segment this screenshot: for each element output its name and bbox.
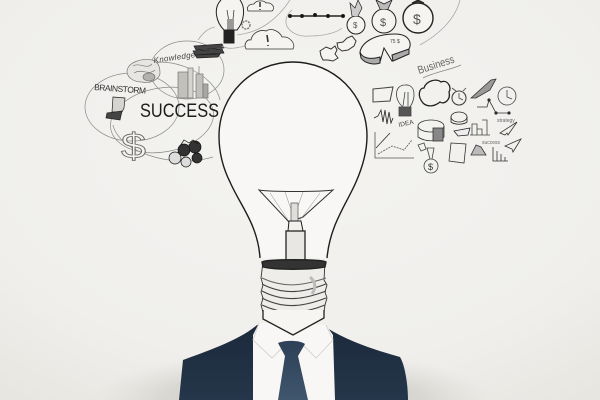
icon: large cloud with exclamation	[245, 30, 294, 49]
waveform	[374, 110, 393, 124]
icon: gear	[242, 21, 250, 29]
icon: paper plane small	[505, 139, 521, 152]
brainstorm label: BRAINSTORM	[94, 82, 146, 96]
icon: puzzle pieces	[320, 36, 356, 61]
business label: Business	[416, 54, 456, 77]
icon: brain	[127, 59, 160, 83]
icon: book stack	[193, 44, 224, 58]
icon: wall clock	[498, 87, 516, 105]
icon: big cloud	[419, 80, 450, 106]
connector curves	[198, 0, 460, 48]
path chart with dots	[477, 99, 510, 114]
small bar chart	[493, 147, 508, 161]
icon: idea bulb	[396, 85, 414, 116]
businessman suit	[179, 323, 408, 400]
shirt	[253, 323, 335, 400]
knowledge label: Knowledge	[153, 50, 196, 65]
filament cone	[259, 190, 333, 261]
icon: money bags row: $	[380, 17, 386, 29]
line graph	[375, 132, 414, 158]
icon: chess rook	[106, 97, 125, 120]
glass outline	[219, 62, 367, 258]
idea label: IDEA	[398, 119, 415, 129]
icon: paper plane large	[500, 122, 517, 135]
icon: money bags row: $	[353, 21, 358, 30]
main light bulb drawing	[219, 62, 367, 335]
icon: city buildings	[178, 66, 208, 98]
icon: money bags	[169, 140, 202, 167]
tie	[278, 341, 308, 400]
left sketch cluster: success diagram	[85, 41, 224, 167]
collar shading	[253, 323, 333, 358]
icon: money bags row: $	[413, 11, 421, 27]
bar chart	[470, 120, 490, 135]
icon: clipboard	[449, 143, 466, 163]
icon: stacked coins	[451, 112, 470, 136]
pie label: 75 $	[390, 39, 400, 45]
dark bulb collar	[262, 260, 326, 269]
icon: pencil	[471, 79, 496, 98]
lower neck point	[263, 310, 324, 335]
icon: money bags row	[347, 0, 433, 34]
icon: dollar sign: $	[121, 127, 146, 166]
success label: SUCCESS	[140, 101, 219, 122]
strategy label: strategy	[497, 118, 515, 124]
jacket	[179, 325, 408, 400]
icon: mountain chart	[471, 145, 486, 155]
icon: money sack with dollar: $	[428, 162, 433, 172]
icon: top light bulb	[216, 0, 244, 43]
pie chart	[360, 34, 410, 64]
screw base	[261, 260, 327, 312]
success small label: success	[482, 140, 501, 146]
icon: note card	[373, 87, 393, 102]
icon: small tags	[418, 143, 426, 151]
orbit ellipses	[85, 41, 224, 161]
right sketch cluster: business	[373, 54, 521, 173]
icon: money sack with dollar	[424, 148, 438, 173]
timeline	[288, 13, 345, 18]
icon: alarm clock	[452, 88, 466, 105]
top sketch cluster	[198, 0, 460, 64]
cylinder chart	[418, 120, 444, 141]
icon: small cloud with exclamation	[247, 1, 274, 11]
